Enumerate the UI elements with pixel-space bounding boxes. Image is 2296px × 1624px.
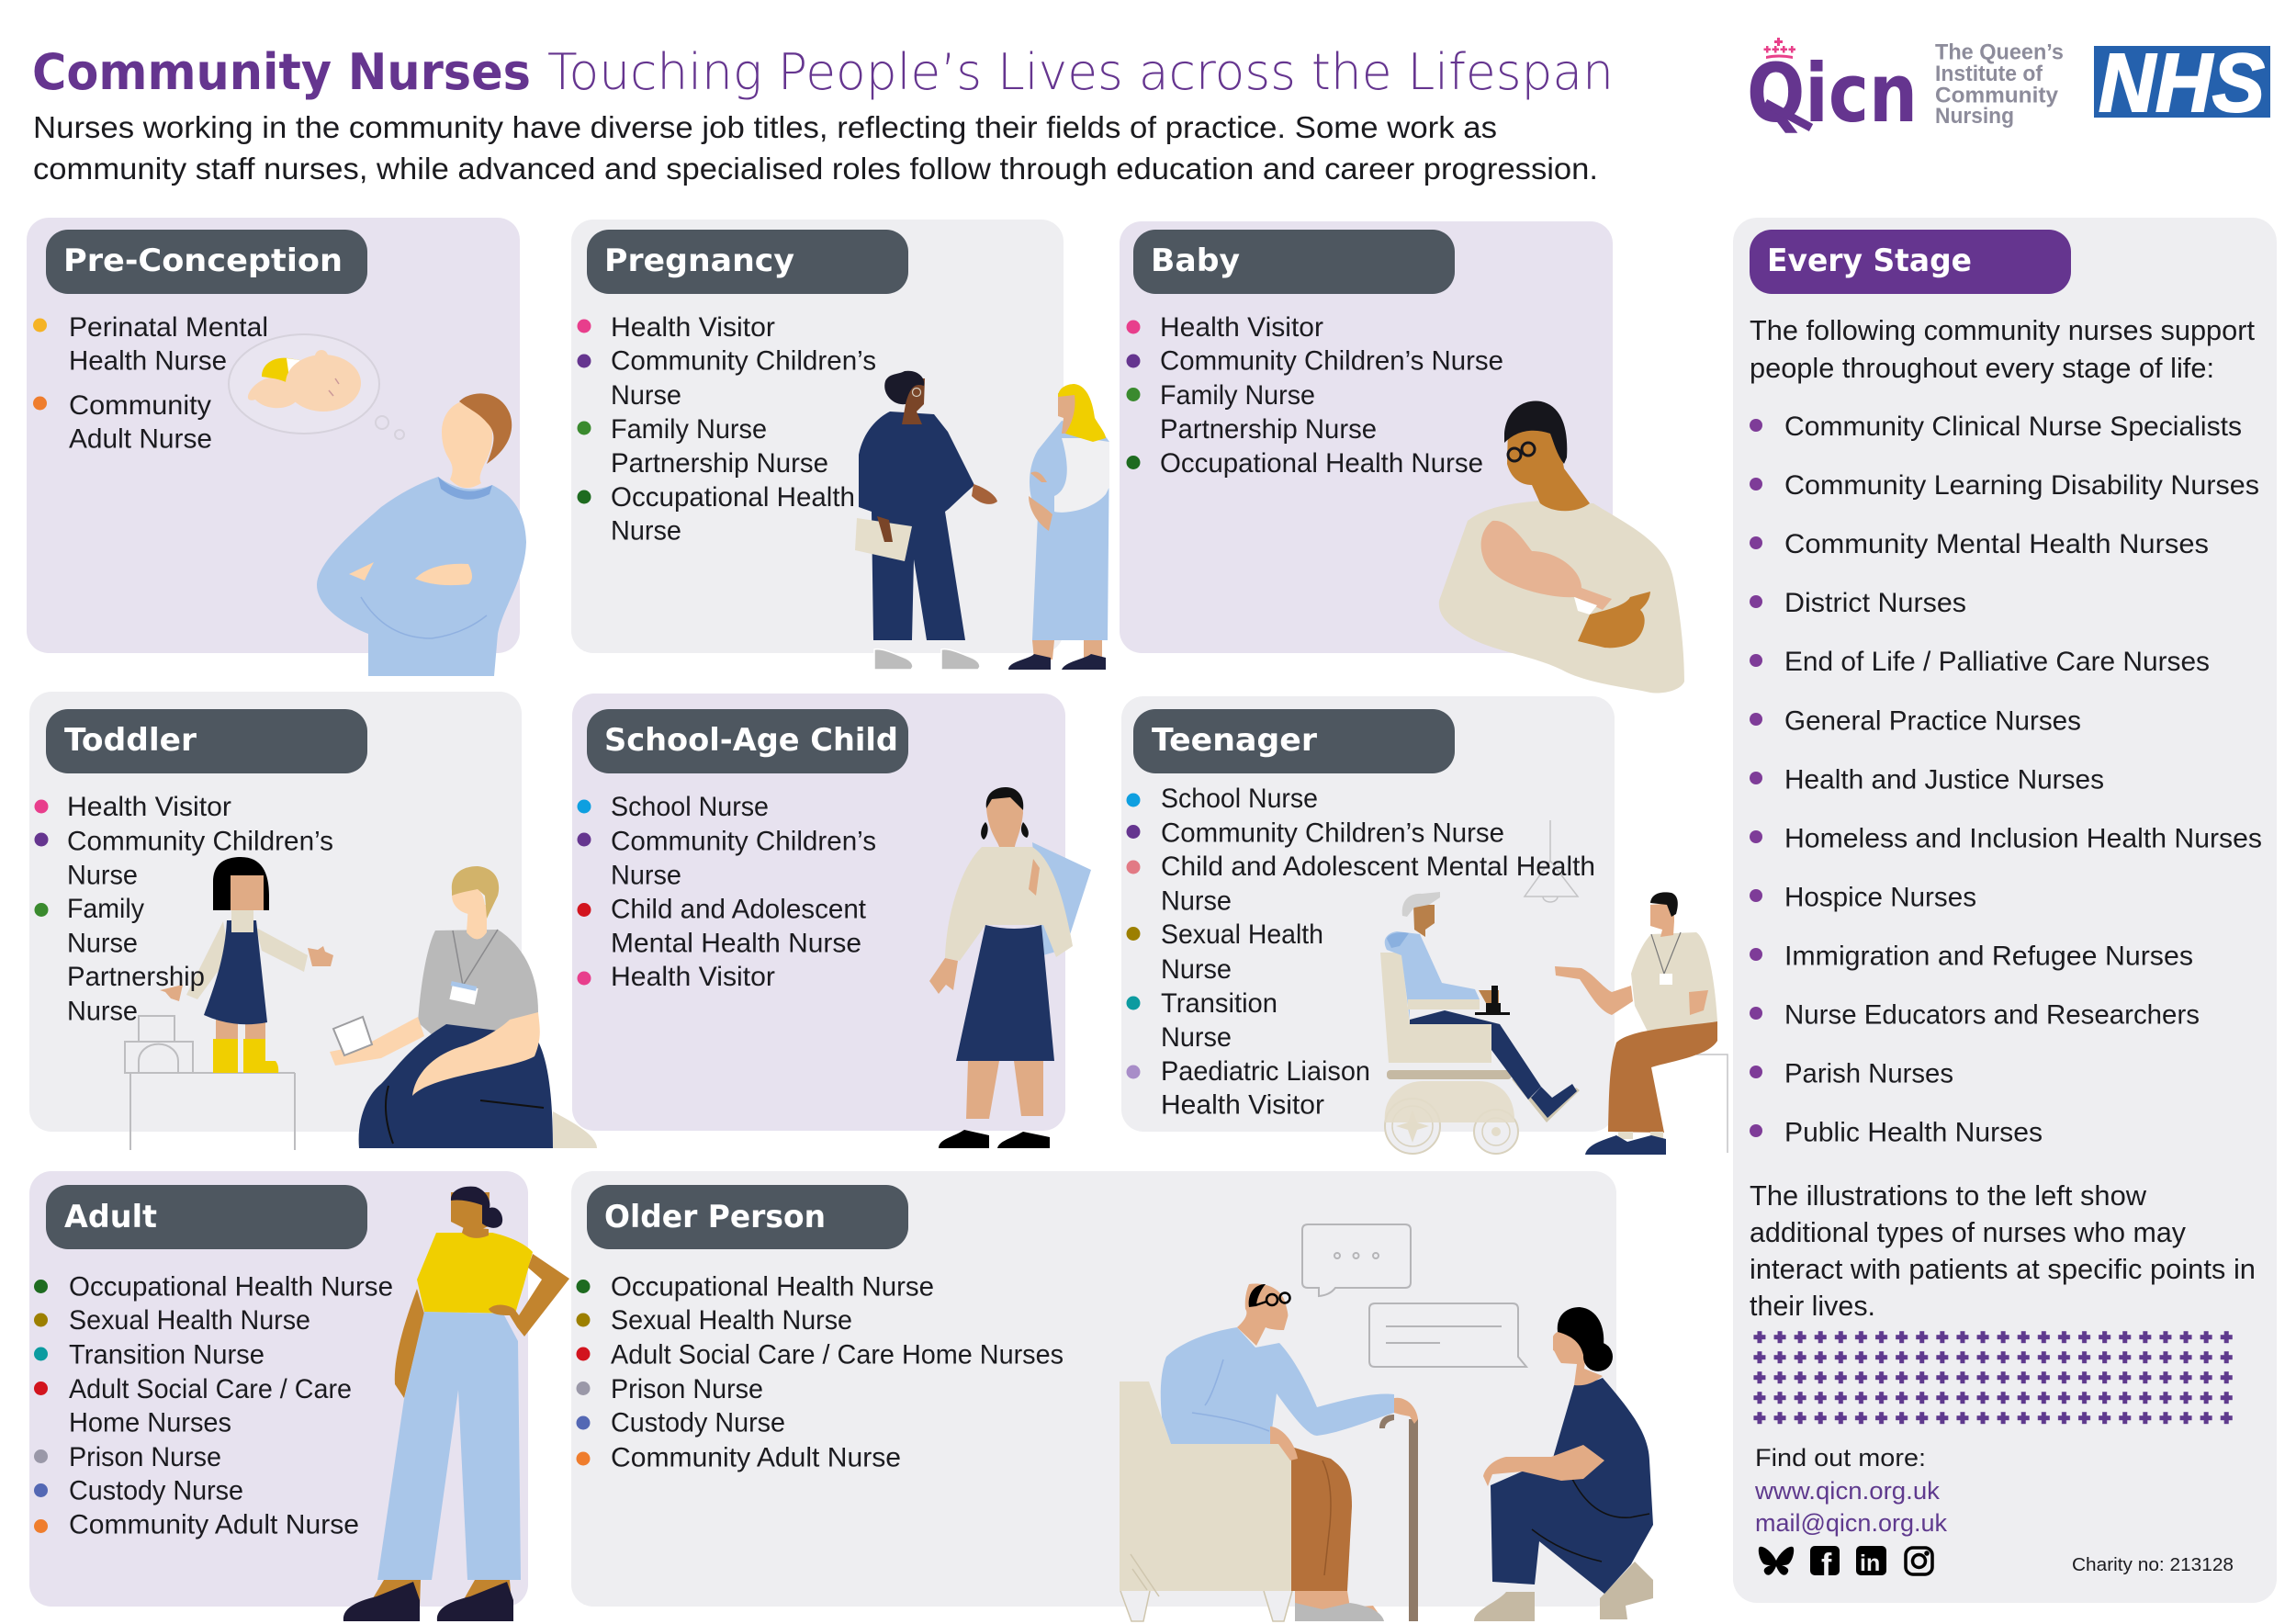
list: pre-conception nurses: Adult Nurse	[69, 424, 212, 454]
list: pregnancy nurses	[577, 312, 876, 546]
list: pregnancy nurses: Nurse	[611, 516, 681, 546]
heading: adult	[46, 1185, 367, 1249]
text: illustrations note: additional types of nurses who may	[1750, 1216, 2186, 1248]
list: baby nurses	[1126, 312, 1503, 479]
list: school-age nurses: Health Visitor	[611, 962, 775, 992]
list: pregnancy nurses: Nurse	[611, 380, 681, 411]
illustration: pregnant woman	[1008, 384, 1109, 670]
list: teenager nurses: Child and Adolescent Mental Health	[1161, 851, 1595, 882]
list: every stage nurses: Public Health Nurses	[1784, 1117, 2043, 1148]
heading: pre-conception: Pre-Conception	[63, 242, 343, 279]
illustration: wheelchair user	[1380, 892, 1580, 1154]
illustration: thought bubble with baby	[229, 334, 404, 439]
charity number: Charity no: 213128	[2072, 1555, 2234, 1575]
illustration: hanging lamp	[1525, 820, 1578, 902]
list: adult nurses: Occupational Health Nurse	[69, 1271, 393, 1303]
list: baby nurses: Health Visitor	[1160, 312, 1323, 343]
illustration: speech bubble with dots	[1302, 1224, 1411, 1296]
heading: toddler	[46, 709, 367, 773]
icon: instagram	[1906, 1548, 1932, 1574]
list: older person nurses: Custody Nurse	[611, 1407, 785, 1438]
list: every stage nurses: District Nurses	[1784, 588, 1966, 618]
list: every stage nurses: General Practice Nurses	[1784, 705, 2081, 737]
illustration: kneeling nurse with card	[330, 866, 597, 1148]
illustration: table and toy blocks	[125, 1016, 295, 1150]
logo: QICN: Nursing	[1935, 104, 2014, 129]
list: toddler nurses: Nurse	[67, 928, 138, 959]
list: teenager nurses: School Nurse	[1161, 784, 1318, 814]
illustration: older man in armchair with cane	[1120, 1284, 1418, 1621]
logo: NHS: NHS	[2099, 38, 2265, 130]
heading: every stage	[1750, 230, 2071, 294]
list: every stage nurses: Nurse Educators and Researchers	[1784, 999, 2200, 1031]
contact details	[1754, 1444, 1947, 1537]
heading: adult: Adult	[64, 1199, 157, 1235]
list: toddler nurses: Family	[67, 894, 144, 924]
illustration: toddler	[160, 857, 333, 1073]
heading: teenager	[1133, 709, 1455, 773]
list: adult nurses: Custody Nurse	[69, 1475, 243, 1506]
list: older person nurses: Adult Social Care / Care Home Nurses	[611, 1339, 1064, 1370]
title	[32, 43, 1614, 101]
list: every stage nurses: Immigration and Refugee Nurses	[1784, 941, 2193, 972]
list: older person nurses: Occupational Health Nurse	[611, 1271, 934, 1303]
heading: older person: Older Person	[604, 1199, 826, 1235]
illustration: standing woman	[343, 1187, 569, 1621]
panel: baby	[1120, 221, 1684, 693]
illustration: seated nurse	[1555, 892, 1728, 1155]
list: teenager nurses: Nurse	[1161, 954, 1232, 985]
list: every stage nurses: Homeless and Inclusion Health Nurses	[1784, 823, 2262, 854]
illustration: crouching nurse	[1474, 1307, 1653, 1621]
contact details: www.qicn.org.uk	[1754, 1477, 1940, 1505]
list: older person nurses: Prison Nurse	[611, 1374, 763, 1404]
list: school-age nurses: Child and Adolescent	[611, 895, 866, 924]
list: older person nurses	[577, 1271, 1064, 1473]
list: teenager nurses: Paediatric Liaison	[1161, 1056, 1370, 1087]
heading: pre-conception	[46, 230, 367, 294]
contact details: mail@qicn.org.uk	[1755, 1509, 1947, 1537]
list: every stage nurses: Health and Justice Nurses	[1784, 764, 2104, 795]
panel: teenager	[1121, 696, 1728, 1155]
list: teenager nurses: Nurse	[1161, 885, 1232, 917]
heading: pregnancy: Pregnancy	[604, 242, 794, 279]
panel: pre-conception	[27, 218, 526, 676]
list: adult nurses: Sexual Health Nurse	[69, 1305, 310, 1336]
list: every stage nurses: Hospice Nurses	[1784, 882, 1976, 913]
list: pregnancy nurses: Community Children’s	[611, 345, 876, 377]
list: every stage nurses: Community Clinical Nurse Specialists	[1784, 412, 2242, 442]
panel: pregnancy	[571, 220, 1109, 670]
list: pregnancy nurses: Partnership Nurse	[611, 448, 828, 479]
text: illustrations note: interact with patients at specific points in	[1750, 1253, 2256, 1285]
list: school-age nurses: Mental Health Nurse	[611, 928, 861, 959]
panel: adult	[29, 1171, 569, 1621]
heading: older person	[587, 1185, 908, 1249]
list: every stage nurses: Community Learning Disability Nurses	[1784, 470, 2259, 501]
title: Community Nurses	[32, 43, 531, 101]
list: every stage nurses: Parish Nurses	[1784, 1058, 1953, 1089]
text: every stage intro	[1750, 314, 2255, 384]
list: pregnancy nurses: Family Nurse	[611, 414, 767, 445]
intro text	[33, 110, 1598, 186]
heading: baby	[1133, 230, 1455, 294]
heading: pregnancy	[587, 230, 908, 294]
list: toddler nurses: Community Children’s	[67, 827, 333, 856]
intro text: Nurses working in the community have diverse job titles, reflecting their fields of practice. Some work as	[33, 110, 1497, 144]
list: teenager nurses: Community Children’s Nurse	[1161, 818, 1504, 849]
illustration: thinking person	[317, 393, 526, 676]
logo: QICN: Community	[1935, 83, 2059, 108]
list: older person nurses: Community Adult Nurse	[611, 1442, 901, 1473]
illustration: nurse with folder	[855, 371, 997, 670]
text: illustrations note: their lives.	[1750, 1290, 1875, 1322]
list: teenager nurses: Transition	[1161, 988, 1277, 1019]
heading: toddler: Toddler	[64, 722, 197, 759]
list: toddler nurses: Health Visitor	[67, 792, 231, 822]
list: teenager nurses: Health Visitor	[1161, 1089, 1324, 1121]
list: toddler nurses: Partnership	[67, 962, 205, 992]
panel: older person	[571, 1171, 1653, 1621]
logo: QICN: The Queen’s	[1935, 40, 2064, 64]
list: toddler nurses: Nurse	[67, 996, 138, 1027]
icon: facebook: f	[1821, 1548, 1832, 1583]
panel: toddler	[29, 692, 597, 1150]
list: baby nurses: Occupational Health Nurse	[1160, 448, 1483, 479]
intro text: community staff nurses, while advanced and specialised roles follow through education and career progression.	[33, 152, 1598, 186]
icon: linkedin: in	[1860, 1551, 1880, 1576]
illustration: speech bubble with lines	[1369, 1303, 1526, 1367]
heading: school-age child	[587, 709, 908, 773]
list: pregnancy nurses: Health Visitor	[611, 312, 775, 343]
list: adult nurses: Prison Nurse	[69, 1442, 221, 1472]
panel: school-age child	[572, 694, 1091, 1148]
list: school-age nurses: Community Children’s	[611, 827, 876, 856]
list: pre-conception nurses: Community	[69, 390, 211, 421]
text: every stage intro: people throughout every stage of life:	[1750, 352, 2214, 384]
icon: linkedin	[1856, 1546, 1886, 1576]
logo: QICN: Institute of	[1935, 62, 2043, 86]
list: adult nurses: Adult Social Care / Care	[69, 1374, 352, 1404]
heading: every stage: Every Stage	[1767, 242, 1972, 279]
illustration: man holding baby	[1439, 401, 1684, 693]
list: teenager nurses: Nurse	[1161, 1022, 1232, 1053]
icon: facebook	[1810, 1546, 1840, 1583]
title: Touching People’s Lives across the Lifespan	[547, 43, 1614, 101]
list: toddler nurses	[35, 792, 333, 1027]
list: toddler nurses: Nurse	[67, 860, 138, 891]
icon: bluesky	[1759, 1547, 1794, 1575]
list: school-age nurses: School Nurse	[611, 792, 769, 822]
list: school-age nurses: Nurse	[611, 860, 681, 891]
heading: baby: Baby	[1151, 242, 1240, 279]
panel: every stage	[1733, 218, 2277, 1603]
list: baby nurses: Family Nurse	[1160, 380, 1315, 411]
list: teenager nurses: Sexual Health	[1161, 919, 1323, 950]
heading: teenager: Teenager	[1152, 722, 1317, 759]
list: adult nurses: Community Adult Nurse	[69, 1510, 359, 1539]
list: older person nurses: Sexual Health Nurse	[611, 1305, 852, 1336]
list: every stage nurses: Community Mental Health Nurses	[1784, 529, 2209, 559]
list: pre-conception nurses: Health Nurse	[69, 345, 227, 377]
list: school-age nurses	[577, 792, 876, 992]
list: baby nurses: Community Children’s Nurse	[1160, 345, 1503, 377]
heading: school-age child: School-Age Child	[604, 722, 898, 759]
logo: QICN: Qicn	[1747, 46, 1918, 141]
decorative plus grid	[1750, 1327, 2236, 1428]
text: illustrations note: The illustrations to the left show	[1750, 1179, 2147, 1212]
list: adult nurses: Home Nurses	[69, 1407, 231, 1438]
list: baby nurses: Partnership Nurse	[1160, 414, 1377, 445]
list: pre-conception nurses: Perinatal Mental	[69, 312, 268, 343]
text: illustrations note	[1750, 1179, 2256, 1322]
list: every stage nurses: End of Life / Palliative Care Nurses	[1784, 647, 2210, 677]
logo: QICN	[1747, 38, 2064, 141]
contact details: Find out more:	[1755, 1444, 1926, 1472]
list: every stage nurses	[1750, 412, 2262, 1148]
list: pre-conception nurses	[33, 312, 268, 454]
list: teenager nurses	[1126, 784, 1595, 1121]
text: every stage intro: The following community nurses support	[1750, 314, 2255, 346]
illustration: school girl	[929, 787, 1091, 1148]
list: adult nurses: Transition Nurse	[69, 1339, 264, 1370]
list: adult nurses	[34, 1271, 393, 1539]
list: pregnancy nurses: Occupational Health	[611, 482, 855, 513]
